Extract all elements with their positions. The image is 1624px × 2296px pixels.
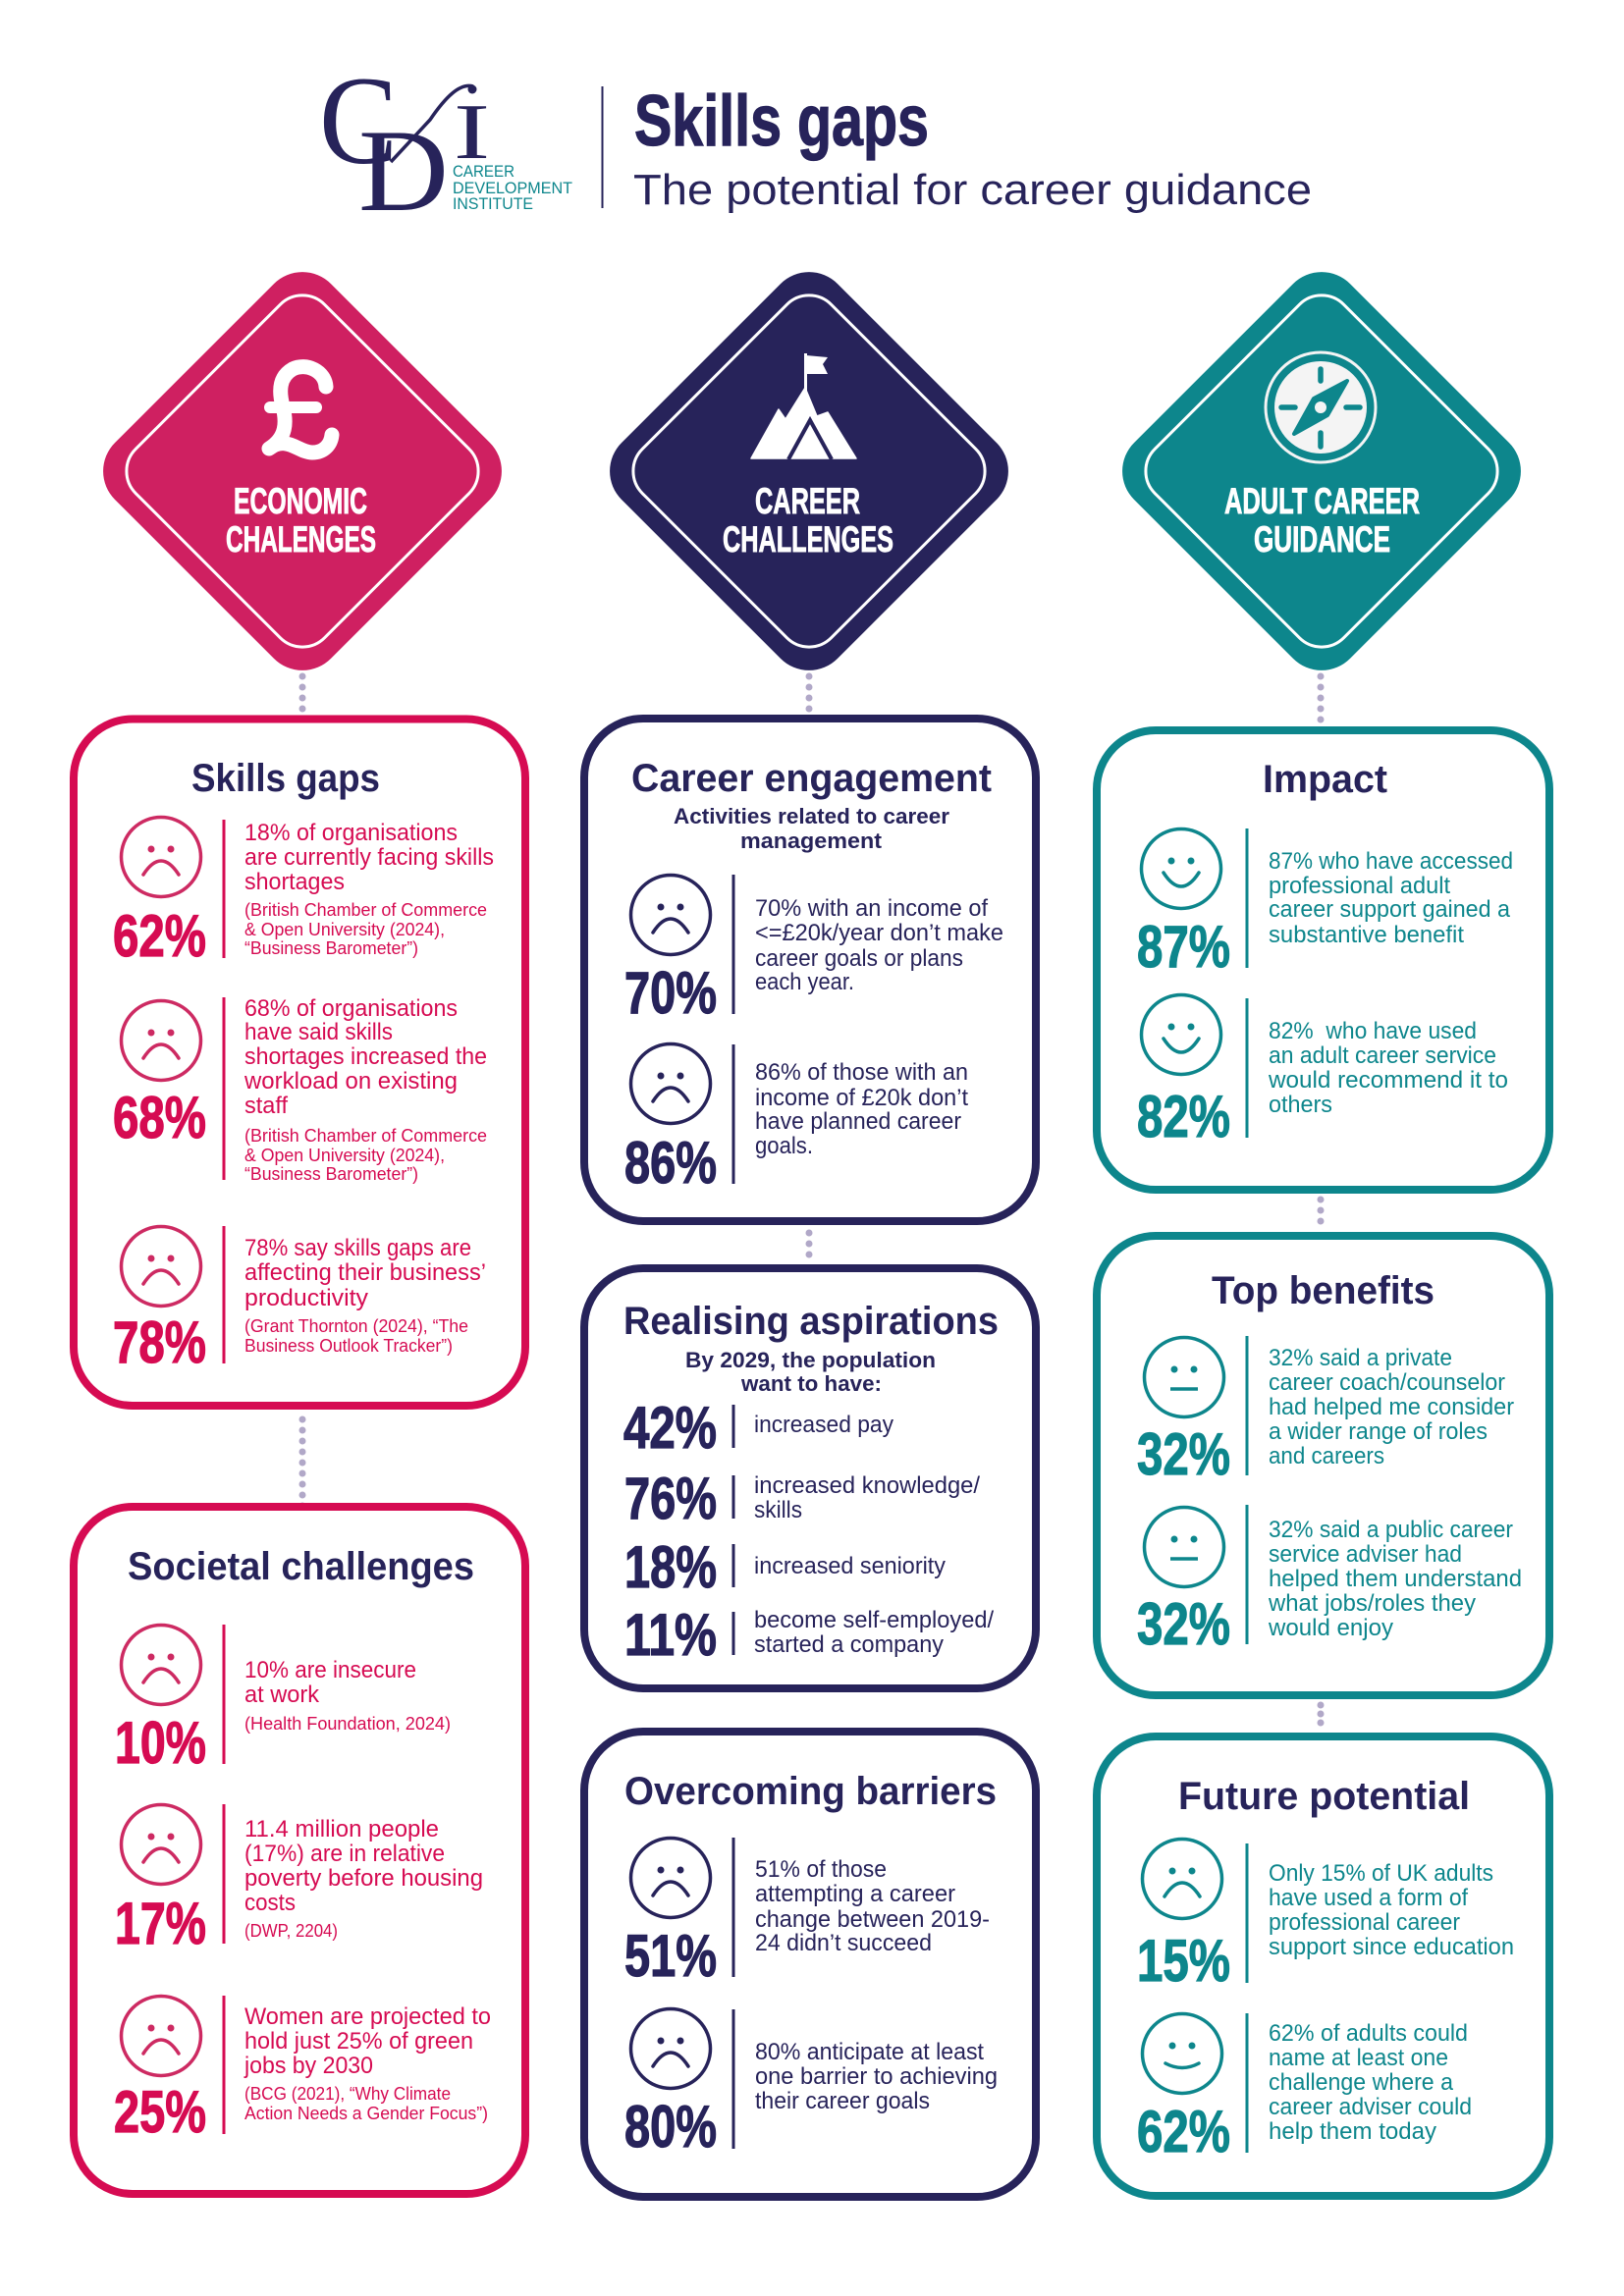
text block — [1269, 848, 1513, 948]
text block: 24 didn’t succeed — [755, 1930, 932, 1956]
text block: have used a form of — [1269, 1885, 1468, 1911]
icon: sad face — [122, 1997, 200, 2075]
text block: would enjoy — [1268, 1615, 1393, 1641]
percentage: 17% — [115, 1891, 206, 1956]
text block: workload on existing — [244, 1068, 458, 1095]
text block: Only 15% of UK adults — [1269, 1860, 1493, 1887]
icon: sad face — [630, 876, 711, 954]
text block: shortages — [244, 869, 345, 895]
text block: professional adult — [1269, 873, 1450, 899]
panel: impact — [1097, 730, 1549, 1190]
percentage: 87% — [1137, 914, 1230, 980]
text block — [244, 820, 494, 958]
panel: career engagement — [584, 719, 1036, 1221]
text block: “Business Barometer”) — [244, 1164, 418, 1184]
text block — [755, 2039, 998, 2114]
text block — [1268, 1018, 1508, 1118]
stat: 78% — [113, 1226, 486, 1375]
icon: happy face — [1141, 828, 1221, 909]
percentage: 80% — [624, 2094, 717, 2160]
subtitle: The potential for career guidance — [633, 166, 1312, 214]
stat: 11%: started a company — [754, 1631, 944, 1658]
text block — [755, 1059, 968, 1159]
stat: 18% — [624, 1534, 946, 1600]
icon: pound sign — [269, 367, 332, 453]
heading: Societal challenges — [128, 1545, 474, 1588]
text block: <=£20k/year don’t make — [755, 920, 1003, 946]
label — [723, 481, 893, 560]
text block: 70% with an income of — [755, 895, 988, 922]
text block: 32% said a private — [1269, 1345, 1452, 1371]
text block: attempting a career — [755, 1881, 955, 1907]
icon: sad face — [122, 1227, 200, 1306]
stat: 86% — [624, 1044, 968, 1196]
stat: 42% — [623, 1395, 893, 1461]
text block: would recommend it to — [1268, 1067, 1508, 1094]
text block: 18% of organisations — [244, 820, 458, 846]
subheading: Activities related to career — [674, 804, 949, 828]
text block: are currently facing skills — [244, 844, 494, 871]
label: ADULT CAREER — [1224, 481, 1420, 521]
panel: top benefits — [1097, 1236, 1549, 1695]
stat: 11% — [624, 1602, 994, 1668]
text block: professional career — [1269, 1909, 1460, 1936]
icon: mountain with flag — [751, 353, 856, 459]
text block: 62% of adults could — [1269, 2020, 1468, 2047]
logo: CDI Career Development Institute — [319, 51, 572, 236]
text block: Business Outlook Tracker”) — [244, 1336, 453, 1356]
stat: 10% — [115, 1625, 451, 1776]
text block: substantive benefit — [1269, 922, 1464, 948]
logo: CDI Career Development Institute: DEVELOPMENT — [453, 179, 572, 197]
logo: CDI Career Development Institute: INSTITUTE — [453, 194, 533, 213]
panel: societal challenges — [74, 1507, 525, 2194]
text block: have said skills — [244, 1019, 393, 1045]
percentage: 10% — [115, 1710, 206, 1776]
icon: sad face — [630, 1044, 711, 1123]
text block: challenge where a — [1269, 2069, 1454, 2096]
stat: 15% — [1137, 1840, 1514, 1994]
percentage: 86% — [624, 1130, 717, 1196]
percentage: 82% — [1137, 1084, 1230, 1149]
text block: 32% said a public career — [1269, 1517, 1513, 1543]
text block: jobs by 2030 — [244, 2053, 373, 2079]
icon: sad face — [630, 1838, 711, 1918]
diamond: adult career guidance — [1106, 255, 1538, 687]
text block: Women are projected to — [244, 2003, 491, 2030]
percentage: 51% — [624, 1923, 717, 1989]
text block: (Grant Thornton (2024), “The — [244, 1316, 468, 1336]
heading: Overcoming barriers — [624, 1770, 997, 1813]
text block: 11.4 million people — [244, 1816, 439, 1842]
stat: 42%: 42% — [623, 1395, 717, 1461]
icon: slightly smiling face — [1143, 2014, 1221, 2093]
text block: costs — [244, 1890, 296, 1916]
icon: sad face — [630, 2008, 711, 2089]
percentage: 62% — [1137, 2099, 1230, 2164]
text block: 51% of those — [755, 1856, 887, 1883]
text block: have planned career — [755, 1108, 961, 1135]
text block: (17%) are in relative — [244, 1841, 445, 1867]
text block: goals. — [755, 1133, 813, 1159]
text block — [244, 1657, 451, 1734]
stat: 62% — [1137, 2013, 1472, 2164]
text block: Action Needs a Gender Focus”) — [244, 2104, 488, 2123]
text block: others — [1269, 1092, 1332, 1118]
stat: 17% — [115, 1804, 483, 1956]
stat: 18%: increased seniority — [754, 1553, 946, 1579]
text block: at work — [244, 1682, 320, 1708]
text block: affecting their business’ — [244, 1259, 486, 1286]
text block: 78% say skills gaps are — [244, 1235, 471, 1261]
label — [226, 481, 376, 560]
text block — [244, 1235, 486, 1356]
text block: 86% of those with an — [755, 1059, 968, 1086]
stat: 70% — [624, 875, 1003, 1026]
stat: 11%: 11% — [624, 1602, 717, 1668]
label — [1224, 481, 1420, 560]
text block — [1268, 1517, 1522, 1641]
text block: “Business Barometer”) — [244, 938, 418, 958]
text block: (British Chamber of Commerce — [244, 900, 487, 920]
text block: what jobs/roles they — [1268, 1590, 1476, 1617]
stat: 62% — [113, 817, 494, 969]
text block: shortages increased the — [244, 1043, 487, 1070]
logo: CDI Career Development Institute: CAREER — [453, 162, 514, 181]
percentage: 32% — [1137, 1591, 1230, 1657]
percentage: 70% — [624, 960, 717, 1026]
text block — [1269, 2020, 1472, 2145]
text block: hold just 25% of green — [244, 2028, 473, 2055]
stat: 32% private — [1137, 1336, 1514, 1487]
percentage: 32% — [1137, 1421, 1230, 1487]
heading: Top benefits — [1212, 1269, 1435, 1312]
panel: skills gaps — [74, 719, 525, 1406]
text block — [244, 995, 487, 1184]
stat: 80% — [624, 2008, 998, 2160]
text block: income of £20k don’t — [755, 1085, 968, 1111]
percentage: 15% — [1137, 1928, 1230, 1994]
subheading: management — [740, 828, 883, 853]
icon: sad face — [1143, 1840, 1221, 1918]
text block: & Open University (2024), — [244, 1146, 445, 1165]
stat: 76% — [624, 1466, 980, 1531]
icon: sad face — [122, 1001, 200, 1080]
stat: 32% public — [1137, 1505, 1522, 1657]
stat: 11%: become self-employed/ — [754, 1607, 994, 1633]
stat: 42%: increased pay — [754, 1412, 893, 1438]
stat: 76%: skills — [754, 1497, 802, 1523]
text block: poverty before housing — [244, 1865, 483, 1892]
text block: helped them understand — [1269, 1566, 1522, 1592]
text block: service adviser had — [1269, 1541, 1462, 1568]
stat: 76%: 76% — [624, 1466, 717, 1531]
label: GUIDANCE — [1254, 519, 1390, 560]
text block: (Health Foundation, 2024) — [244, 1714, 451, 1734]
subheading — [674, 804, 949, 853]
label: CHALENGES — [226, 519, 376, 560]
panel: realising aspirations — [584, 1268, 1036, 1688]
text block: help them today — [1269, 2118, 1436, 2145]
text block: career coach/counselor — [1269, 1369, 1505, 1396]
heading: Career engagement — [631, 757, 992, 800]
icon: sad face — [122, 1804, 200, 1885]
text block: career goals or plans — [755, 945, 963, 972]
label: ECONOMIC — [234, 481, 367, 521]
text block: support since education — [1269, 1934, 1514, 1960]
label: CHALLENGES — [723, 519, 893, 560]
heading: Realising aspirations — [623, 1300, 999, 1343]
stat: 18%: 18% — [624, 1534, 717, 1600]
heading: Impact — [1263, 758, 1387, 801]
stat: 51% — [624, 1838, 990, 1989]
icon: happy face — [1141, 995, 1221, 1074]
text block: (DWP, 2204) — [244, 1921, 338, 1941]
panel: future potential — [1097, 1736, 1549, 2196]
text block: career support gained a — [1269, 896, 1511, 923]
icon: sad face — [122, 817, 200, 897]
percentage: 25% — [114, 2079, 206, 2145]
stat: 82% — [1137, 995, 1508, 1149]
subheading: By 2029, the population — [685, 1348, 936, 1372]
logo: CDI Career Development Institute: D — [358, 105, 449, 236]
stat: 25% — [114, 1996, 491, 2145]
panel: overcoming barriers — [584, 1732, 1036, 2197]
diamond: career challenges — [593, 255, 1025, 687]
text block: their career goals — [755, 2088, 930, 2114]
percentage: 68% — [113, 1085, 206, 1150]
text block: 68% of organisations — [244, 995, 458, 1022]
subheading — [685, 1348, 936, 1396]
text block: an adult career service — [1269, 1042, 1496, 1069]
text block: productivity — [244, 1285, 368, 1311]
text block: a wider range of roles — [1269, 1418, 1488, 1445]
text block: each year. — [755, 969, 854, 995]
text block: change between 2019- — [755, 1906, 990, 1933]
percentage: 62% — [113, 903, 206, 969]
icon: neutral face — [1145, 1337, 1223, 1417]
icon: sad face — [122, 1626, 200, 1704]
stat: 76%: increased knowledge/ — [754, 1472, 980, 1499]
text block: name at least one — [1269, 2045, 1448, 2071]
text block — [244, 2003, 491, 2123]
logo: CDI Career Development Institute: C — [319, 51, 398, 190]
text block: staff — [244, 1093, 288, 1119]
text block: 80% anticipate at least — [755, 2039, 984, 2065]
subheading: want to have: — [740, 1371, 882, 1396]
text block — [755, 895, 1003, 995]
text block: had helped me consider — [1269, 1394, 1514, 1420]
text block: career adviser could — [1269, 2094, 1472, 2120]
text block: and careers — [1269, 1443, 1384, 1469]
text block: & Open University (2024), — [244, 920, 445, 939]
text block: 10% are insecure — [244, 1657, 416, 1683]
title: Skills gaps — [634, 81, 929, 161]
text block: (British Chamber of Commerce — [244, 1126, 487, 1146]
stat: 68% — [113, 995, 487, 1184]
heading: Future potential — [1178, 1775, 1470, 1818]
logo: CDI Career Development Institute: I — [454, 89, 490, 176]
text block: (BCG (2021), “Why Climate — [244, 2084, 451, 2104]
text block: 87% who have accessed — [1269, 848, 1513, 875]
text block — [1269, 1860, 1514, 1960]
diamond: economic challenges — [86, 255, 518, 687]
percentage: 78% — [113, 1309, 206, 1375]
icon: compass — [1266, 352, 1376, 462]
stat: 87% — [1137, 828, 1513, 980]
text block — [755, 1856, 990, 1956]
text block: 82% who have used — [1269, 1018, 1477, 1044]
text block: one barrier to achieving — [755, 2063, 998, 2090]
heading: Skills gaps — [191, 757, 380, 800]
label: CAREER — [755, 481, 860, 521]
text block — [244, 1816, 483, 1941]
text block — [1269, 1345, 1514, 1469]
icon: neutral face — [1145, 1508, 1223, 1586]
